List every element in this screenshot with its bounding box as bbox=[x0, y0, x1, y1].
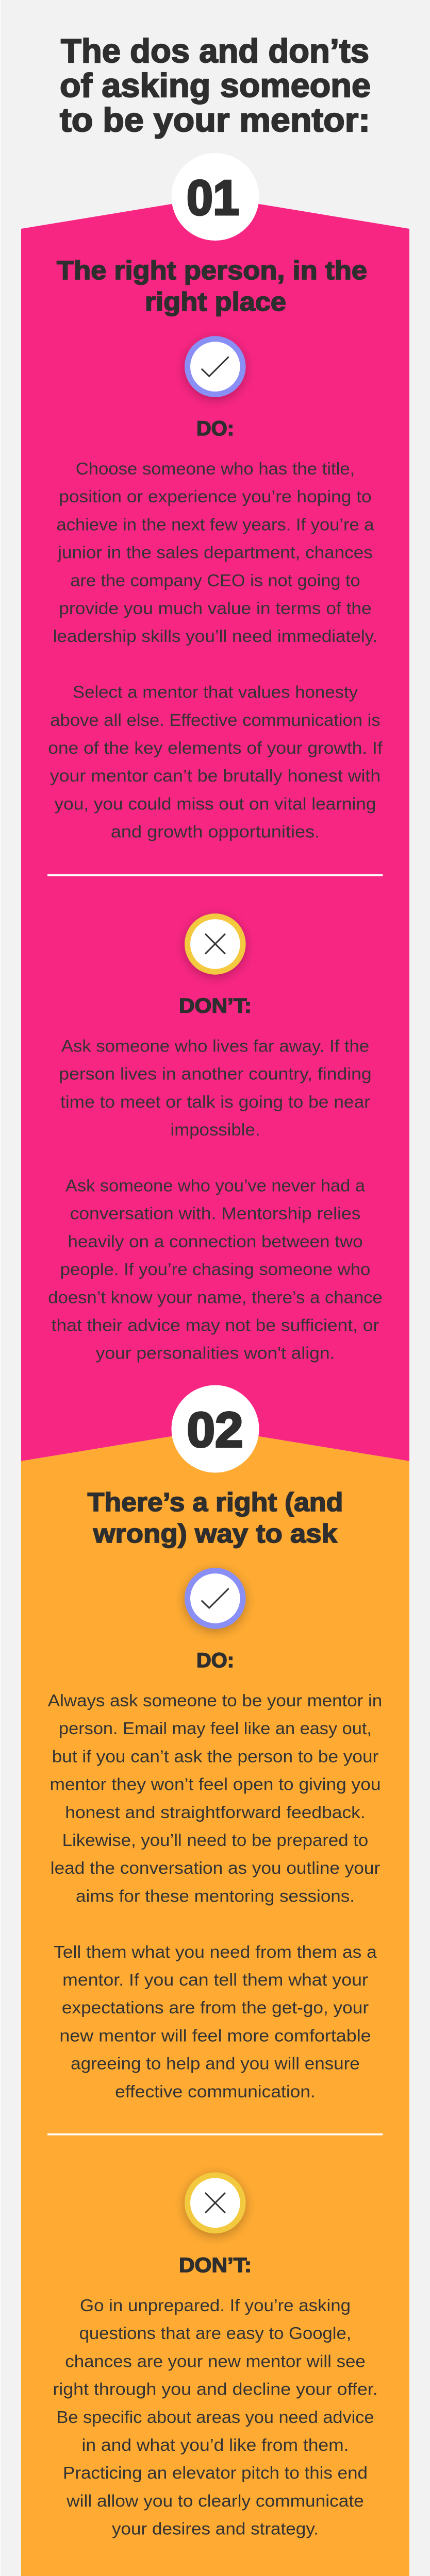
icon: cross bbox=[185, 913, 246, 975]
don't text: Go in unprepared. If you’re asking bbox=[80, 2296, 351, 2315]
don't text: Be specific about areas you need advice bbox=[57, 2408, 374, 2427]
do text: Choose someone who has the title, bbox=[76, 459, 355, 478]
don't text: doesn’t know your name, there’s a chance bbox=[48, 1287, 383, 1307]
do text: leadership skills you’ll need immediately. bbox=[53, 626, 377, 646]
don't text bbox=[53, 2296, 378, 2576]
do text: mentor they won’t feel open to giving you bbox=[49, 1775, 381, 1794]
section heading 01: The right person, in the bbox=[57, 256, 367, 285]
do text: effective communication. bbox=[115, 2082, 316, 2101]
do text: Select a mentor that values honesty bbox=[73, 683, 358, 702]
do text: position or experience you’re hoping to bbox=[59, 487, 372, 506]
do text: Always ask someone to be your mentor in bbox=[48, 1691, 382, 1710]
do text: you, you could miss out on vital learning bbox=[55, 794, 376, 813]
number badge 01: 01 bbox=[187, 170, 239, 226]
section heading 01: right place bbox=[145, 287, 286, 316]
do text: achieve in the next few years. If you’re a bbox=[57, 515, 374, 534]
section heading 01 bbox=[57, 256, 367, 316]
number badge 02 bbox=[171, 1385, 259, 1472]
don't text: questions that are easy to Google, bbox=[79, 2324, 351, 2343]
don't text: time to meet or talk is going to be near bbox=[60, 1092, 370, 1111]
don't text: impossible. bbox=[170, 1120, 260, 1139]
title bbox=[60, 32, 371, 139]
don't text: that their advice may not be sufficient, or bbox=[52, 1316, 379, 1334]
do text: but if you can’t ask the person to be your bbox=[52, 1747, 378, 1766]
do label: DO: bbox=[196, 1649, 234, 1672]
title: to be your mentor: bbox=[60, 101, 370, 139]
do text: agreeing to help and you will ensure bbox=[71, 2054, 360, 2073]
don't label: DON’T: bbox=[179, 2254, 252, 2277]
do text: Likewise, you’ll need to be prepared to bbox=[62, 1831, 368, 1850]
do text: your mentor can’t be brutally honest with bbox=[50, 766, 381, 785]
section heading 02: wrong) way to ask bbox=[93, 1519, 338, 1548]
don't text bbox=[48, 1037, 383, 1363]
don't text: chances are your new mentor will see bbox=[65, 2351, 366, 2370]
icon: check bbox=[185, 1568, 246, 1629]
do label: DO: bbox=[196, 417, 234, 440]
do text: are the company CEO is not going to bbox=[70, 571, 360, 590]
do text: person. Email may feel like an easy out, bbox=[59, 1719, 372, 1738]
title: of asking someone bbox=[60, 66, 371, 104]
don't text: right through you and decline your offer. bbox=[53, 2380, 378, 2399]
do text: expectations are from the get-go, your bbox=[62, 1998, 369, 2017]
do text: one of the key elements of your growth. If bbox=[48, 738, 383, 757]
don't text: in and what you’d like from them. bbox=[81, 2435, 349, 2454]
do text: junior in the sales department, chances bbox=[57, 543, 373, 562]
do text: honest and straightforward feedback. bbox=[65, 1803, 366, 1822]
do text: new mentor will feel more comfortable bbox=[59, 2026, 371, 2045]
do text: mentor. If you can tell them what your bbox=[62, 1970, 368, 1989]
don't text: people. If you’re chasing someone who bbox=[60, 1260, 370, 1279]
panel: section 02 right and wrong way to ask bbox=[21, 1385, 409, 2576]
number badge 02: 02 bbox=[187, 1402, 243, 1458]
do text: Tell them what you need from them as a bbox=[54, 1942, 377, 1961]
icon: check bbox=[185, 336, 246, 397]
don't text: Practicing an elevator pitch to this end bbox=[63, 2463, 368, 2482]
icon: cross bbox=[185, 2172, 246, 2233]
don't label: DON’T: bbox=[179, 994, 252, 1017]
do text: above all else. Effective communication is bbox=[50, 710, 381, 730]
do text: provide you much value in terms of the bbox=[59, 599, 372, 618]
don't text: your desires and strategy. bbox=[112, 2519, 319, 2538]
do text bbox=[48, 459, 383, 841]
do text: lead the conversation as you outline your bbox=[51, 1858, 380, 1877]
don't text: heavily on a connection between two bbox=[68, 1232, 363, 1251]
panel background pink bbox=[21, 197, 409, 1461]
don't text: Ask someone who lives far away. If the bbox=[61, 1037, 369, 1055]
don't text: Ask someone who you’ve never had a bbox=[65, 1176, 366, 1195]
number badge 01 bbox=[171, 153, 259, 241]
do text bbox=[48, 1691, 382, 2101]
do text: aims for these mentoring sessions. bbox=[76, 1886, 355, 1905]
don't text: your personalities won't align. bbox=[96, 1344, 335, 1363]
panel background orange bbox=[21, 1429, 409, 2576]
section heading 02: There’s a right (and bbox=[88, 1487, 343, 1517]
panel: section 01 the right person bbox=[21, 153, 409, 1461]
section heading 02 bbox=[88, 1487, 343, 1548]
do text: and growth opportunities. bbox=[111, 822, 320, 841]
don't text: conversation with. Mentorship relies bbox=[70, 1204, 360, 1223]
don't text: person lives in another country, finding bbox=[59, 1064, 372, 1083]
don't text: will allow you to clearly communicate bbox=[66, 2491, 364, 2510]
title: The dos and don’ts bbox=[61, 32, 369, 70]
